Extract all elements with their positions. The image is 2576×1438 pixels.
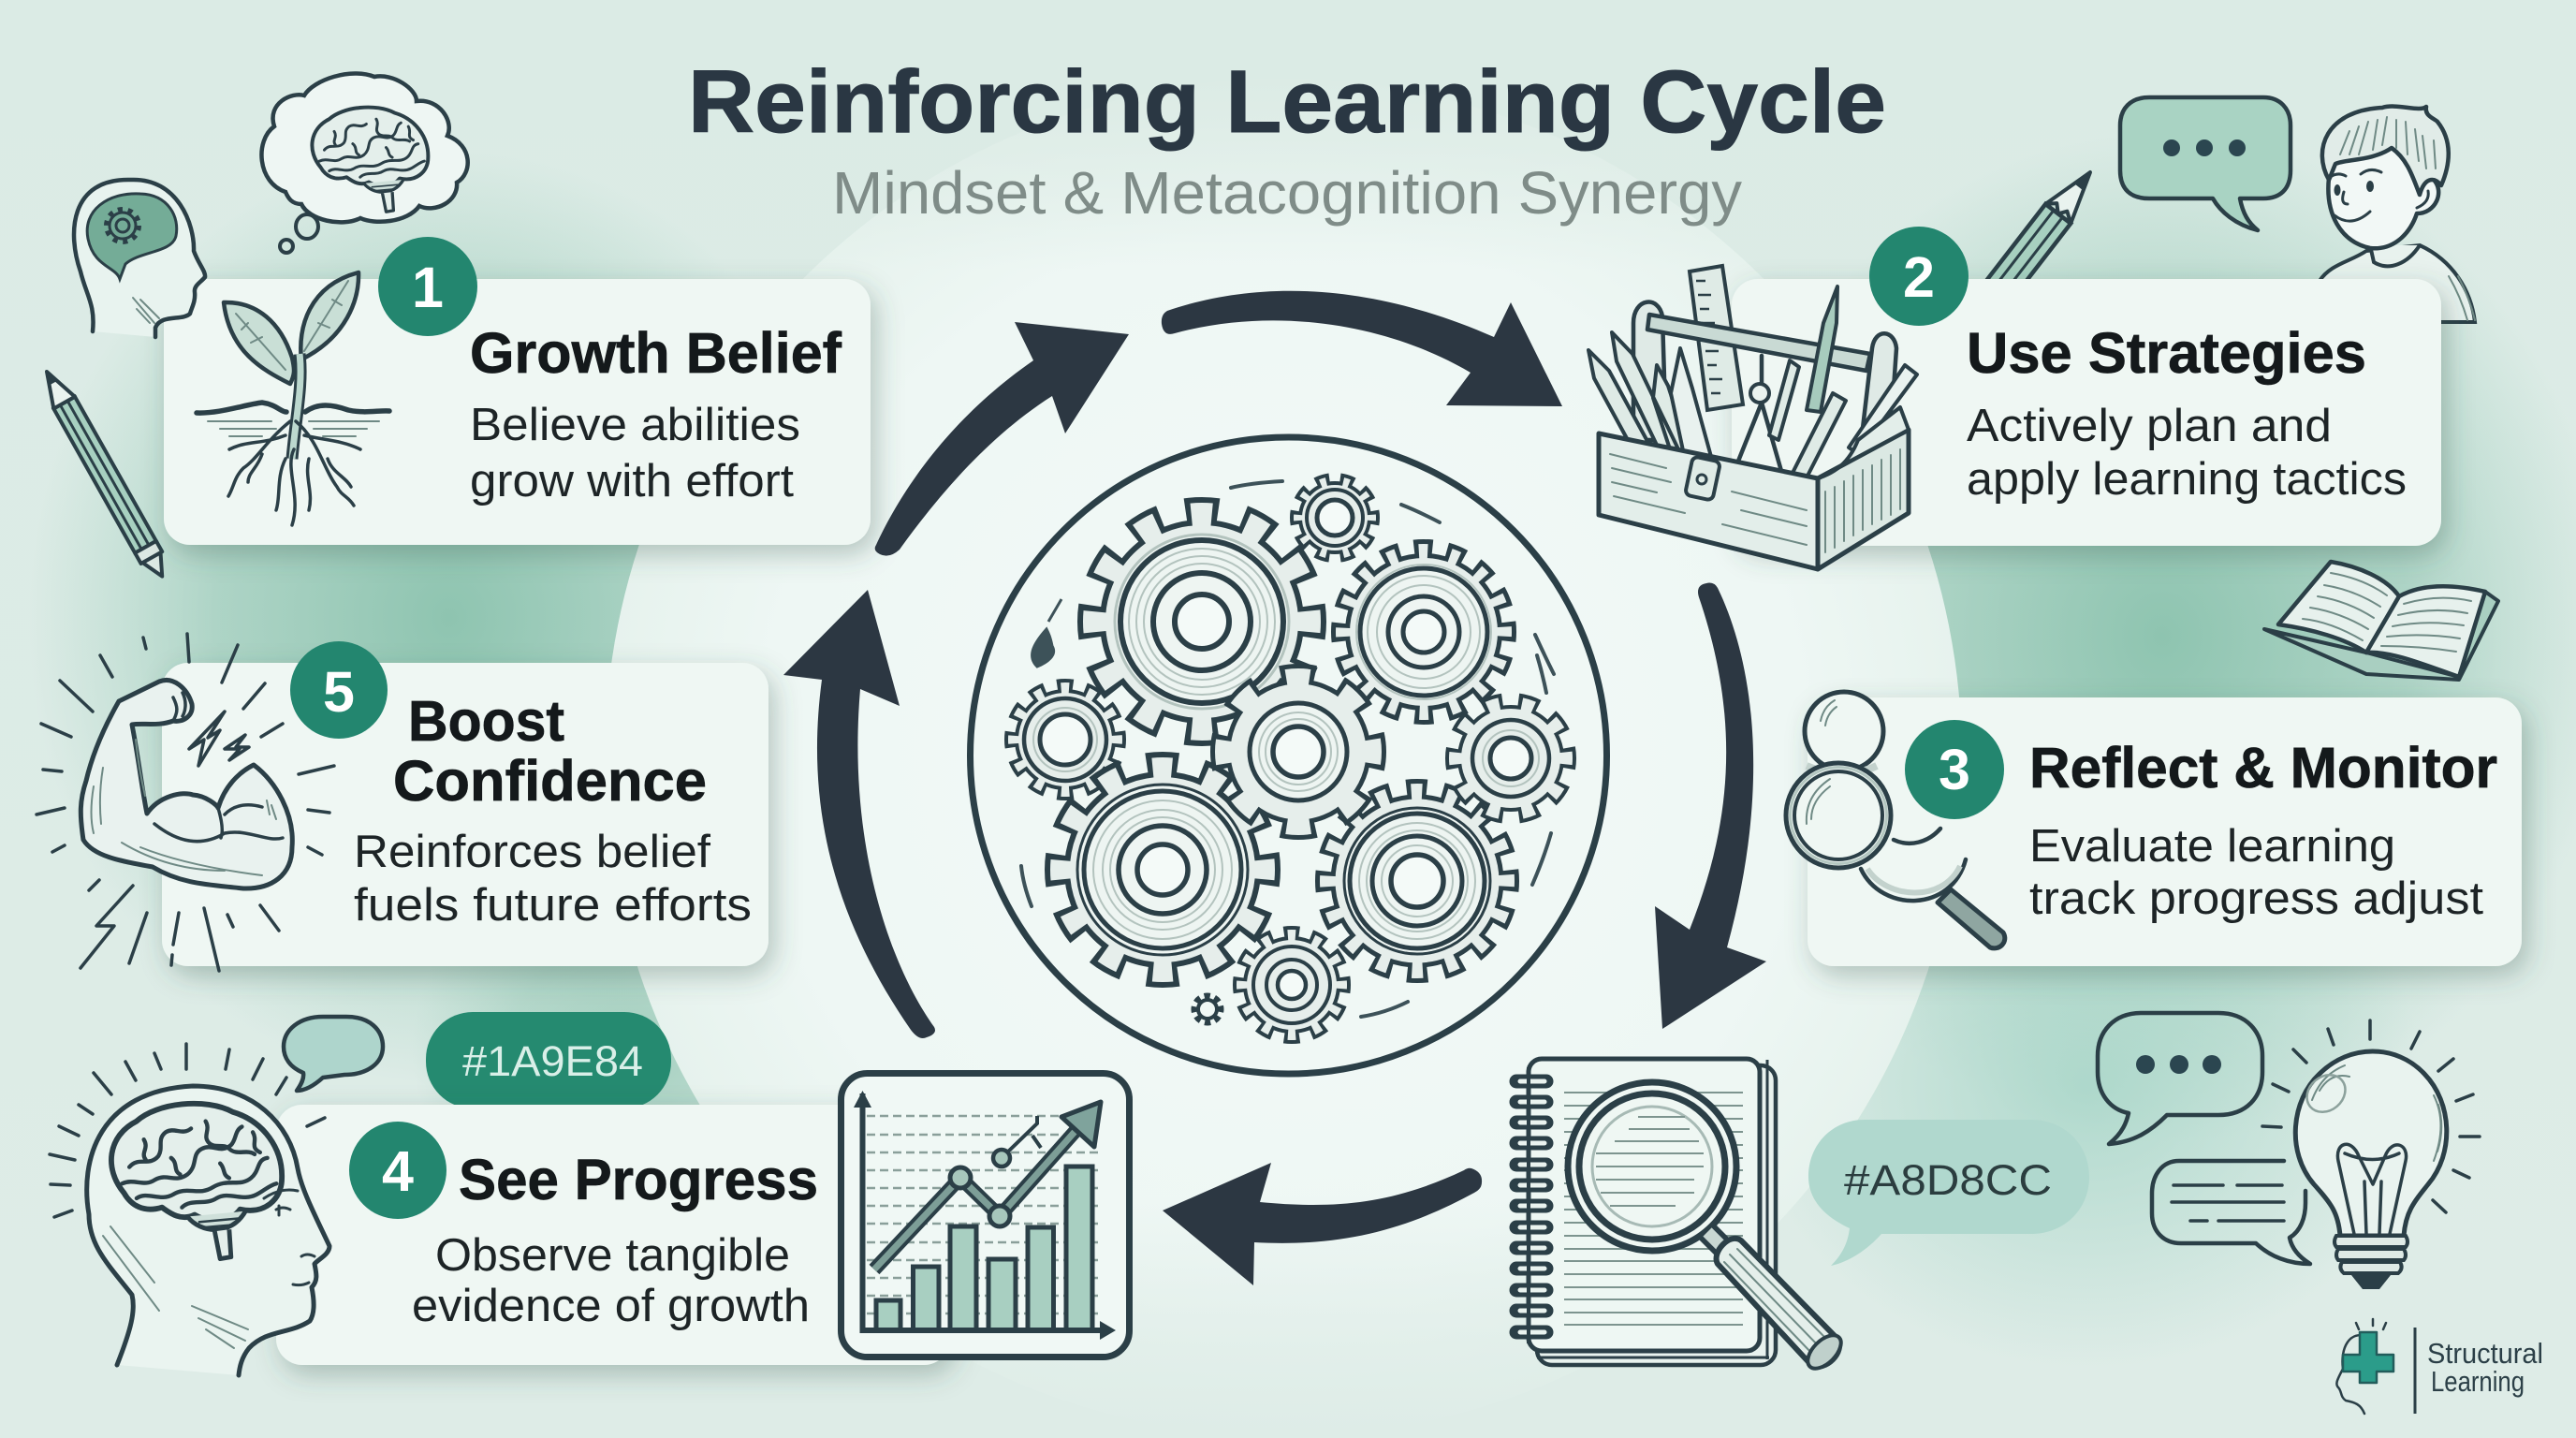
- badge 1: [378, 237, 477, 336]
- icon: flexed arm: [37, 634, 334, 971]
- icon: head with brain: [50, 1044, 329, 1375]
- description: Actively plan and: [1967, 401, 2332, 451]
- gear: top small: [1297, 479, 1372, 556]
- gear: bottom small: [1241, 934, 1342, 1035]
- gear: left small: [1013, 687, 1118, 792]
- number 5: 5: [323, 660, 355, 724]
- icon: open book: [2264, 562, 2498, 680]
- description: Reinforces belief: [354, 827, 710, 877]
- color chip: #A8D8CC: #A8D8CC: [1844, 1156, 2052, 1204]
- icon: boy: [2320, 107, 2475, 322]
- description: Believe abilities: [470, 400, 800, 450]
- icon: speech bubble with dots: [2098, 1013, 2262, 1144]
- gear: center: [1222, 675, 1375, 829]
- description line 2: track progress adjust: [2029, 873, 2483, 924]
- heading: See Progress: [459, 1148, 818, 1211]
- panel: step 5 boost confidence: [37, 634, 768, 971]
- number 1: 1: [412, 256, 444, 319]
- icon: speech bubble with dots: [2120, 97, 2291, 230]
- icon: magnifying glasses: [1786, 692, 2005, 948]
- gear: tiny: [1194, 996, 1221, 1022]
- panel: step 2 use strategies: [1588, 227, 2441, 569]
- panel: step 3 reflect and monitor: [1786, 692, 2522, 966]
- subtitle: Mindset & Metacognition Synergy: [832, 159, 1742, 227]
- badge 3: [1905, 720, 2004, 819]
- color chip: #1A9E84: #1A9E84: [462, 1037, 643, 1085]
- number 4: 4: [382, 1139, 414, 1203]
- description line 2: apply learning tactics: [1967, 454, 2407, 505]
- gear: upper left large: [1093, 513, 1310, 730]
- heading line 2: Confidence: [393, 749, 707, 813]
- icon: pencil left: [37, 366, 173, 582]
- gear: upper right: [1342, 550, 1505, 713]
- color chip: #1A9E84: [426, 1012, 671, 1108]
- description: Evaluate learning: [2029, 821, 2395, 872]
- heading: Growth Belief: [470, 321, 842, 385]
- description line 2: grow with effort: [470, 456, 794, 506]
- logo: structural learning: [2336, 1319, 2543, 1414]
- icon: pencil behind card 2: [1969, 163, 2102, 323]
- description line 2: evidence of growth: [412, 1281, 810, 1331]
- panel: step 1 growth belief: [74, 180, 871, 545]
- heading: Use Strategies: [1967, 321, 2366, 385]
- title: Reinforcing Learning Cycle: [688, 52, 1886, 152]
- arrow: strategies to reflect: [1655, 583, 1766, 1029]
- icon: speech bubble with lines: [2152, 1161, 2310, 1264]
- panel: step 4 see progress: [50, 1044, 950, 1375]
- icon: sprout with roots: [197, 272, 389, 525]
- arrow: growth to strategies: [1162, 291, 1562, 406]
- icon: toolbox: [1588, 266, 1917, 569]
- heading: Boost: [408, 689, 564, 753]
- arrow: boost to growth: [875, 322, 1129, 556]
- logo: structural learning: Learning: [2431, 1365, 2525, 1398]
- arrow: reflect to progress: [1163, 1163, 1482, 1285]
- heading: Reflect & Monitor: [2029, 736, 2497, 800]
- icon: small speech bubble: [284, 1017, 383, 1091]
- icon: head with gear: [74, 180, 205, 337]
- color chip: #A8D8CC: [1808, 1120, 2089, 1266]
- gear: lower right large: [1327, 790, 1507, 972]
- icon: thought cloud with brain: [261, 74, 468, 253]
- gear: right small: [1455, 702, 1567, 814]
- number 3: 3: [1939, 738, 1970, 801]
- icon: light bulb: [2262, 1020, 2480, 1289]
- center circle with gears: [970, 437, 1606, 1074]
- arrow: progress to boost: [783, 590, 935, 1038]
- badge 2: [1869, 227, 1969, 326]
- logo: structural learning: Structural: [2427, 1337, 2543, 1370]
- icon: growth chart: [841, 1073, 1129, 1357]
- icon: notebook with magnifying glass: [1516, 1059, 1847, 1374]
- badge 5: [290, 641, 388, 739]
- badge 4: [349, 1122, 446, 1219]
- description line 2: fuels future efforts: [354, 880, 752, 931]
- gear: lower left large: [1059, 766, 1266, 974]
- number 2: 2: [1903, 245, 1935, 309]
- description: Observe tangible: [435, 1230, 790, 1281]
